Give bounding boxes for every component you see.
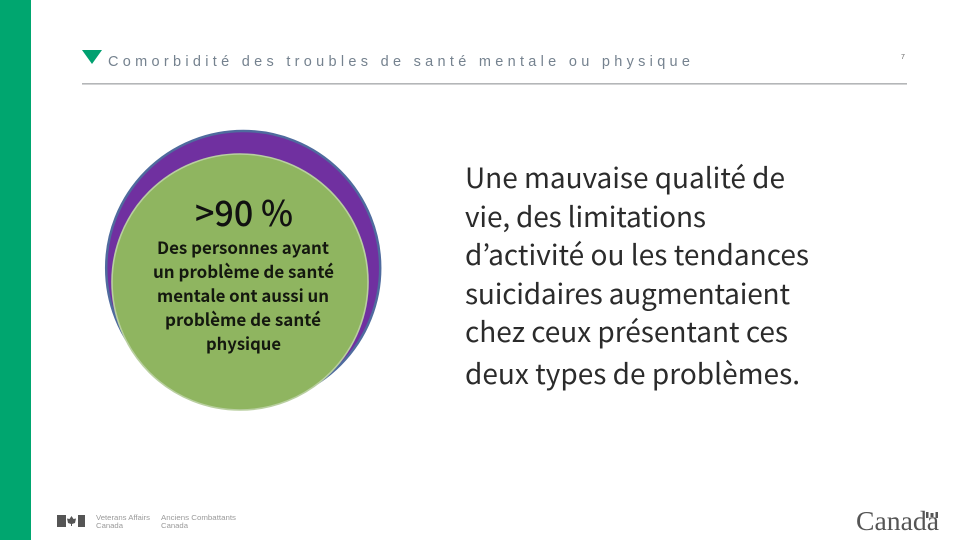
statistic: more than 90 percent: >90 % <box>195 186 293 237</box>
department name: Canada <box>96 521 123 530</box>
statistic description: un problème de santé <box>153 258 334 283</box>
icon: small flag <box>926 512 938 518</box>
body text: Une mauvaise qualité de <box>465 157 785 197</box>
outer purple circle <box>106 131 380 405</box>
icon: Canadian flag <box>57 515 85 527</box>
Canada wordmark: Canada <box>856 506 939 536</box>
circle statistic <box>106 131 380 410</box>
department name: Canada <box>161 521 188 530</box>
inner green circle <box>112 154 368 410</box>
body text: d’activité ou les tendances <box>465 234 809 274</box>
department signature <box>57 513 236 530</box>
statistic description <box>153 234 334 355</box>
department name: Anciens Combattants <box>161 513 236 522</box>
statistic description: problème de santé <box>165 306 321 331</box>
body text: vie, des limitations <box>465 196 706 236</box>
icon: header triangle <box>82 50 102 64</box>
body text <box>465 157 809 393</box>
department name <box>96 513 236 530</box>
department name: Veterans Affairs <box>96 513 150 522</box>
title: Comorbidité des troubles de santé mentale ou physique <box>108 54 690 70</box>
green side band <box>0 0 31 540</box>
statistic description: mentale ont aussi un <box>157 282 329 307</box>
statistic description: Des personnes ayant <box>157 234 329 259</box>
body text: deux types de problèmes. <box>465 353 800 393</box>
body text: suicidaires augmentaient <box>465 273 790 313</box>
page number: 7 <box>901 54 905 61</box>
statistic description: physique <box>206 330 281 355</box>
body text: chez ceux présentant ces <box>465 311 788 351</box>
